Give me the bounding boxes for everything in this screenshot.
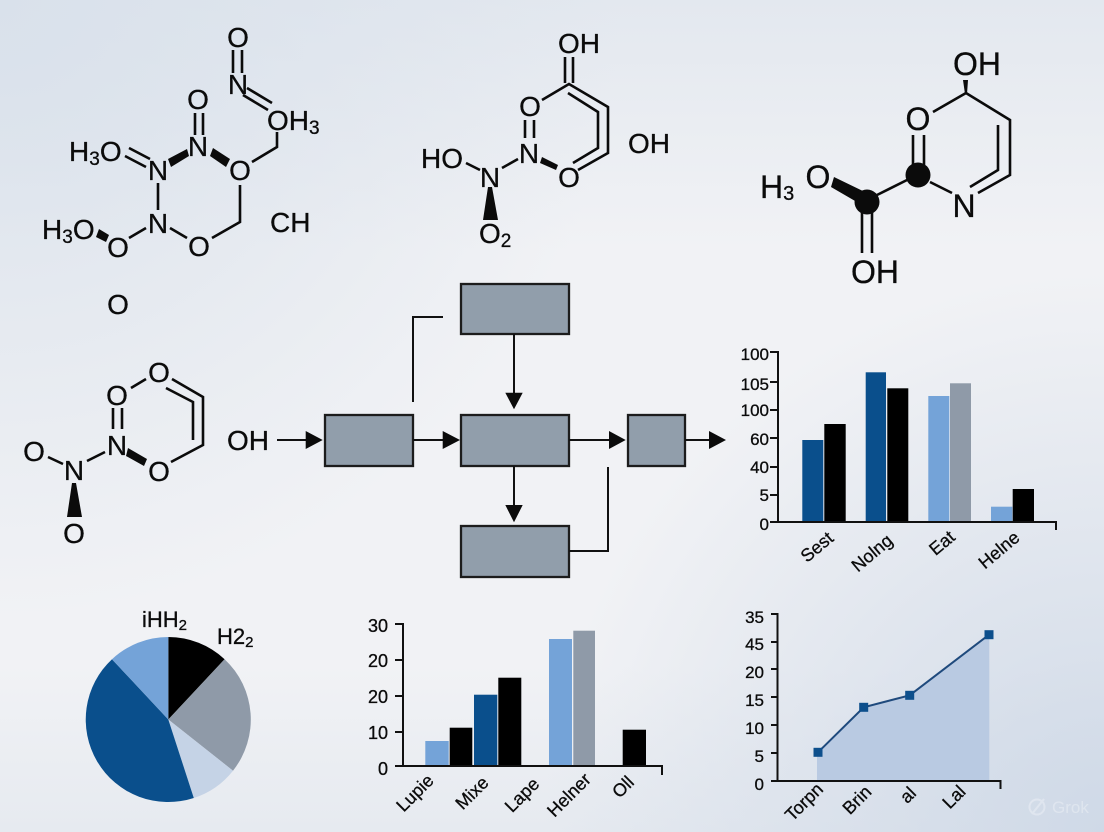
molecule: top centre: OH xyxy=(628,128,670,159)
molecule: top centre: N xyxy=(480,162,500,193)
molecule: top left nitro ring xyxy=(42,22,320,320)
pie chart: 2 xyxy=(245,634,253,651)
y-axis labels: 105 xyxy=(741,375,769,394)
y-axis labels: 20 xyxy=(368,687,388,707)
molecule: middle left: O xyxy=(148,357,170,388)
molecule: top left nitro ring: O xyxy=(100,136,122,167)
label: OH input: OH xyxy=(227,425,269,456)
molecule: middle left: O xyxy=(106,380,128,411)
x-axis labels: Sest xyxy=(797,528,837,566)
molecule: top left nitro ring: 3 xyxy=(309,118,320,139)
molecule: top right: OH xyxy=(953,46,1001,82)
molecule: middle left xyxy=(23,357,203,549)
y-axis labels: 40 xyxy=(750,458,769,477)
molecule: middle left: O xyxy=(23,436,45,467)
molecule: top left nitro ring: H xyxy=(69,136,89,167)
molecule: middle left: O xyxy=(148,456,170,487)
x-axis labels: Torpn xyxy=(781,779,827,825)
y-axis labels xyxy=(741,345,769,534)
watermark: Grok xyxy=(1030,798,1089,817)
x-axis labels: Mixe xyxy=(451,772,493,814)
bar chart: bottom centre xyxy=(368,616,662,821)
molecule: top right: 3 xyxy=(783,183,794,205)
molecule: top centre: N xyxy=(519,138,539,169)
pie chart: H2 xyxy=(217,624,245,649)
x-axis labels: Helner xyxy=(543,769,595,821)
molecule: top left nitro ring: N xyxy=(228,69,248,100)
molecule: top left nitro ring: O xyxy=(188,231,210,262)
molecule: top left nitro ring: O xyxy=(187,84,209,115)
molecule: top right: OH xyxy=(851,254,899,290)
pie chart: iHH xyxy=(142,607,179,632)
axes xyxy=(770,352,1056,530)
x-axis labels xyxy=(797,527,1023,576)
molecule: middle left: N xyxy=(64,455,84,486)
y-axis labels: 35 xyxy=(745,608,764,627)
molecule: top left nitro ring: O xyxy=(227,22,249,53)
molecule: top centre: 2 xyxy=(501,231,511,252)
y-axis labels: 0 xyxy=(760,515,769,534)
molecule: top left nitro ring: OH xyxy=(267,105,309,136)
y-axis labels: 60 xyxy=(750,430,769,449)
molecule: top left nitro ring: 3 xyxy=(89,149,100,170)
x-axis labels: Nolng xyxy=(848,530,896,576)
box: bottom xyxy=(461,526,569,577)
y-axis labels: 10 xyxy=(368,723,388,743)
molecule: top left nitro ring: H xyxy=(42,214,62,245)
area xyxy=(817,635,989,781)
pie chart xyxy=(86,607,253,802)
y-axis labels: 5 xyxy=(760,486,769,505)
watermark: Grok: Grok xyxy=(1052,798,1089,817)
y-axis labels: 20 xyxy=(368,651,388,671)
molecule: top centre: O xyxy=(558,162,580,193)
pie chart: 2 xyxy=(179,617,187,634)
y-axis labels: 45 xyxy=(745,635,764,654)
molecule: top left nitro ring: O xyxy=(107,232,129,263)
molecule: top right xyxy=(760,46,1010,290)
molecule: top centre: O xyxy=(519,91,541,122)
molecule: top left nitro ring: N xyxy=(148,208,168,239)
molecule: top centre: OH xyxy=(558,28,600,59)
box: right xyxy=(628,415,685,466)
box: left xyxy=(325,415,413,466)
y-axis labels: 0 xyxy=(378,759,388,779)
axes xyxy=(771,614,1000,789)
bar chart: top right xyxy=(741,345,1056,576)
bars xyxy=(802,372,1034,522)
x-axis labels: Oll xyxy=(608,772,638,802)
line with markers xyxy=(814,630,994,757)
arrows and connectors xyxy=(277,317,726,551)
molecule: top left nitro ring: O xyxy=(107,289,129,320)
y-axis labels: 0 xyxy=(755,775,764,794)
box: top xyxy=(461,284,569,334)
molecule: top right: O xyxy=(906,101,930,137)
y-axis labels: 100 xyxy=(741,401,769,420)
molecule: top centre: HO xyxy=(421,143,463,174)
molecule: top left nitro ring: O xyxy=(229,155,251,186)
molecule: top left nitro ring: N xyxy=(148,155,168,186)
area line chart: bottom right xyxy=(745,608,1000,825)
x-axis labels: al xyxy=(896,783,920,807)
axes xyxy=(395,624,662,775)
flowchart xyxy=(227,284,726,577)
molecule: top right: O xyxy=(806,159,830,195)
y-axis labels: 100 xyxy=(741,345,769,364)
y-axis labels: 30 xyxy=(368,616,388,636)
x-axis labels xyxy=(392,769,638,821)
molecule: top centre: O xyxy=(479,218,501,249)
molecule: top right: N xyxy=(952,188,976,224)
x-axis labels: Lape xyxy=(501,774,543,816)
y-axis labels: 5 xyxy=(755,747,764,766)
box: centre xyxy=(461,415,569,466)
molecule: top left nitro ring: N xyxy=(188,131,208,162)
molecule: middle left: N xyxy=(107,430,127,461)
molecule: top right: H xyxy=(760,169,783,205)
y-axis labels xyxy=(368,616,388,779)
x-axis labels: Brin xyxy=(839,782,875,818)
molecule: top left nitro ring: 3 xyxy=(62,227,73,248)
x-axis labels xyxy=(781,779,970,825)
molecule: top left nitro ring: CH xyxy=(270,207,310,238)
bars xyxy=(425,631,646,766)
y-axis labels xyxy=(745,608,764,794)
molecule: top centre xyxy=(421,28,670,252)
x-axis labels: Lal xyxy=(938,781,970,813)
x-axis labels: Eat xyxy=(925,527,959,559)
x-axis labels: Helne xyxy=(975,527,1023,573)
y-axis labels: 15 xyxy=(745,691,764,710)
y-axis labels: 20 xyxy=(745,663,764,682)
molecule: top left nitro ring: O xyxy=(73,214,95,245)
molecule: middle left: O xyxy=(63,518,85,549)
x-axis labels: Lupie xyxy=(392,770,438,816)
y-axis labels: 10 xyxy=(745,719,764,738)
